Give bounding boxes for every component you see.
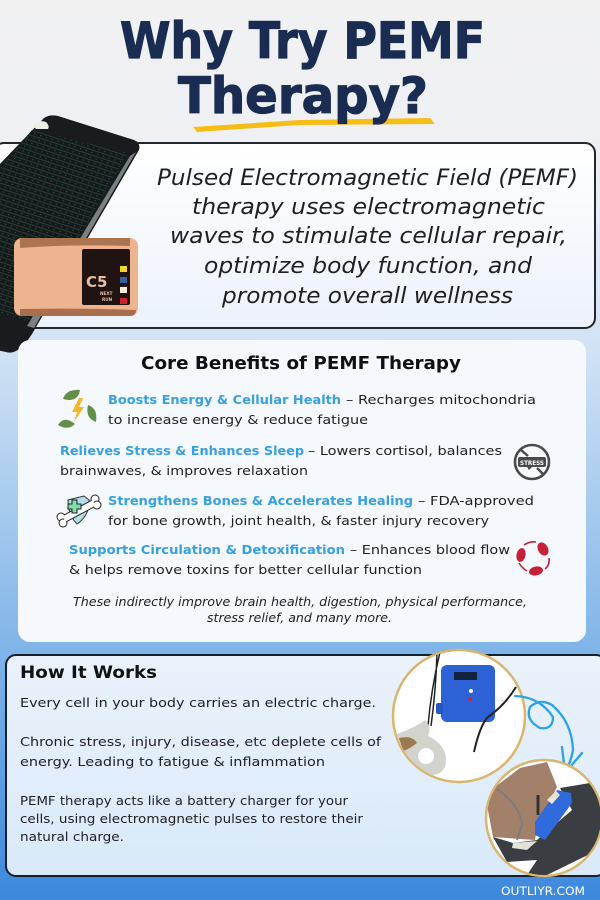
definition text: Pulsed Electromagnetic Field (PEMF): [157, 166, 578, 191]
definition text: [157, 166, 578, 309]
benefit: circulation: [69, 542, 510, 577]
benefit: bones: [108, 493, 534, 528]
benefit: bones: – FDA-approved: [418, 493, 534, 508]
panel: PEMF definition: [0, 143, 595, 328]
benefits summary: stress relief, and many more.: [207, 611, 392, 625]
benefit: circulation: & helps remove toxins for better cellular function: [69, 562, 422, 577]
icon: no stress: [515, 445, 549, 479]
footer brand: OUTLIYR.COM: [501, 884, 585, 898]
how it works text: [20, 695, 382, 844]
benefit: energy: – Recharges mitochondria: [346, 392, 536, 407]
benefit: bones: Strengthens Bones & Accelerates Healing: [108, 493, 413, 508]
title: Why Try PEMF: [120, 12, 485, 70]
controller device: [14, 238, 138, 316]
benefit: circulation: – Enhances blood flow: [350, 542, 510, 557]
definition text: therapy uses electromagnetic: [192, 195, 545, 220]
definition text: optimize body function, and: [204, 254, 533, 279]
title: Therapy?: [178, 67, 428, 125]
icon: bone and shield: [57, 495, 101, 527]
benefits summary: [73, 595, 527, 625]
benefit: stress: – Lowers cortisol, balances: [308, 443, 502, 458]
icon: no stress: STRESS: [520, 459, 544, 467]
benefit: stress: brainwaves, & improves relaxation: [60, 463, 308, 478]
how it works text: Every cell in your body carries an electric charge.: [20, 695, 376, 710]
controller device: C5: [86, 273, 107, 291]
panel: core benefits: [18, 340, 586, 642]
how it works text: natural charge.: [20, 830, 124, 844]
benefit: stress: [60, 443, 502, 478]
how it works text: cells, using electromagnetic pulses to restore their: [20, 812, 363, 826]
core benefits heading: Core Benefits of PEMF Therapy: [141, 354, 462, 374]
benefit: energy: Boosts Energy & Cellular Health: [108, 392, 341, 407]
panel: how it works: [6, 655, 600, 876]
title underline: [193, 118, 435, 132]
benefits summary: These indirectly improve brain health, digestion, physical performance,: [73, 595, 527, 609]
benefit: circulation: Supports Circulation & Detoxification: [69, 542, 345, 557]
controller device: RUN: [102, 297, 113, 302]
benefit: energy: to increase energy & reduce fatigue: [108, 412, 368, 427]
photo: device on neck: [486, 760, 600, 876]
how it works text: energy. Leading to fatigue & inflammation: [20, 754, 325, 769]
how it works heading: How It Works: [20, 663, 157, 682]
photo: blue PEMF device: [393, 650, 525, 782]
PEMF mat: [0, 115, 139, 353]
benefit: energy: [108, 392, 536, 427]
definition text: waves to stimulate cellular repair,: [170, 224, 567, 249]
benefit: bones: for bone growth, joint health, & faster injury recovery: [108, 513, 490, 528]
title: [120, 12, 485, 132]
how it works text: PEMF therapy acts like a battery charger for your: [20, 794, 348, 808]
definition text: promote overall wellness: [221, 284, 513, 309]
how it works text: Chronic stress, injury, disease, etc deplete cells of: [20, 734, 382, 749]
arrow: curly blue: [515, 696, 582, 773]
icon: leaves and bolt: [58, 390, 96, 428]
icon: blood cells: [515, 540, 551, 577]
controller device: NEXT: [100, 291, 113, 296]
benefit: stress: Relieves Stress & Enhances Sleep: [60, 443, 304, 458]
